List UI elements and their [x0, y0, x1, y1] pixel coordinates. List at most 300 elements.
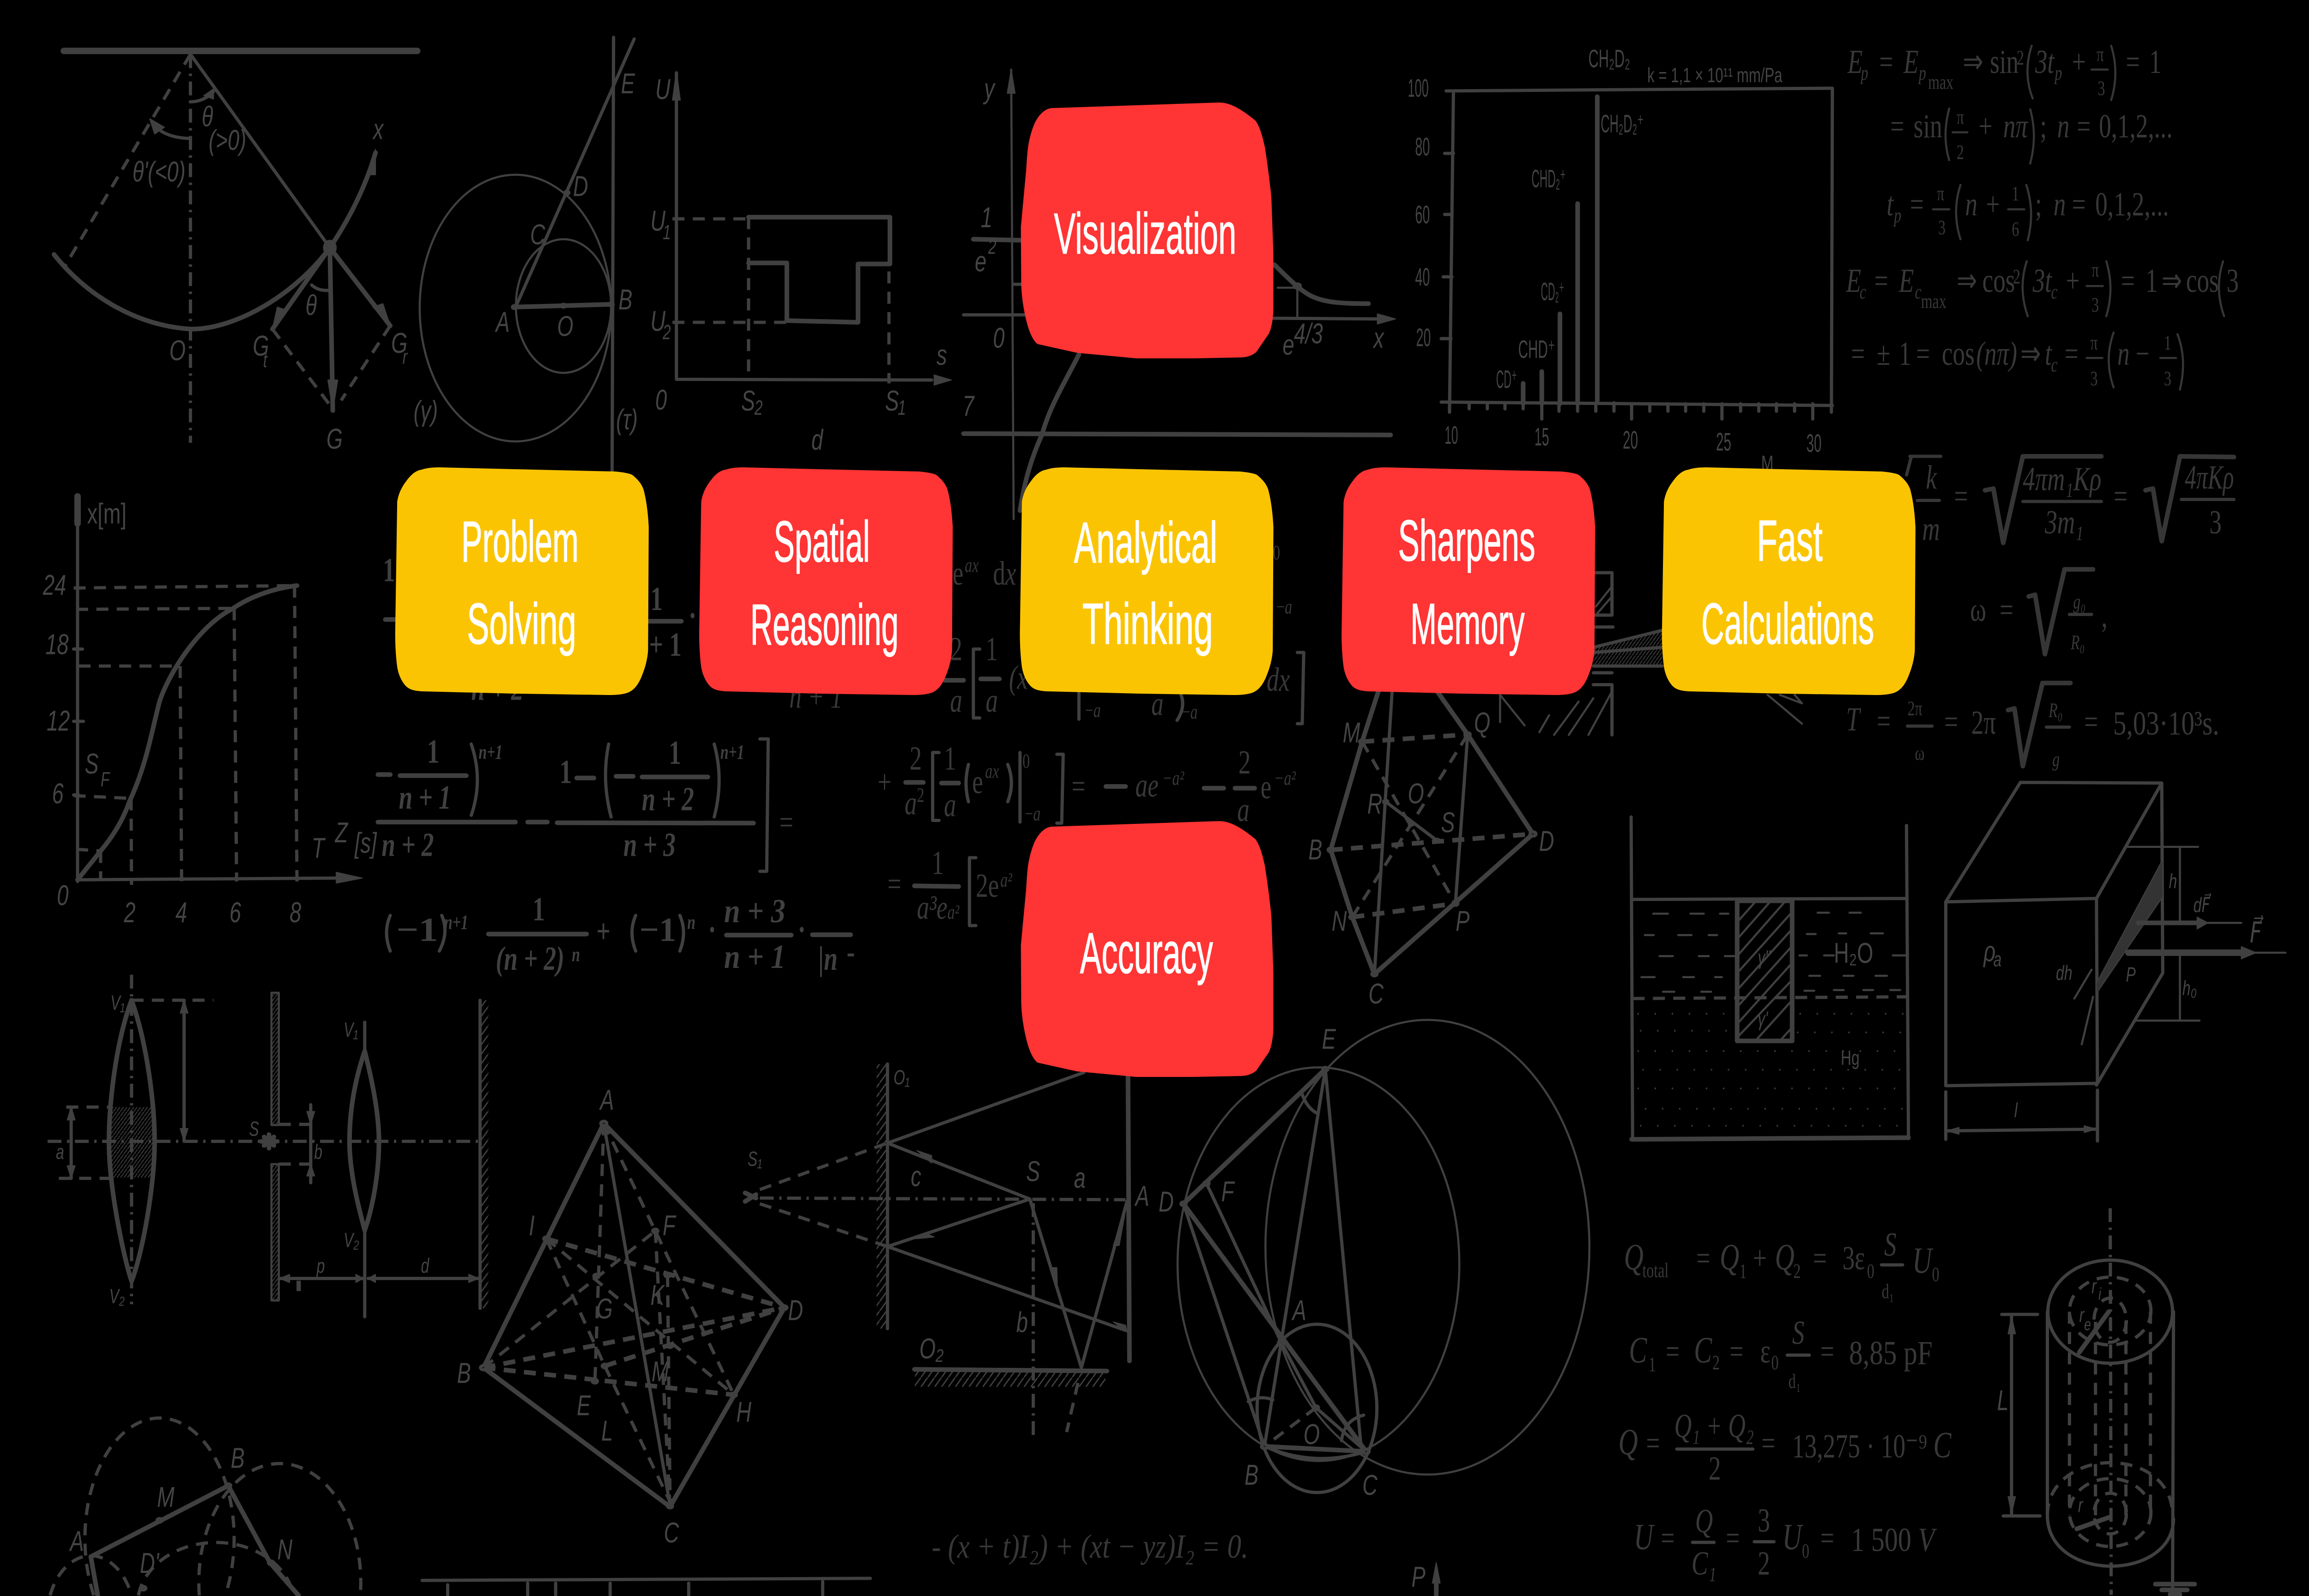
diagram: pyramid with dashed construction lines: A	[599, 1084, 614, 1116]
diagram: circles with inscribed triangles: D	[1159, 1185, 1174, 1218]
formula block: capacitor equations: 1	[1739, 1260, 1747, 1282]
formula block: energy maxima equations: 3	[1938, 217, 1946, 239]
diagram: mirror ray reflection: a	[1074, 1162, 1086, 1194]
formula block: capacitor equations: 8,85 pF	[1849, 1334, 1933, 1372]
formula block: energy maxima equations: 3	[2097, 78, 2105, 100]
diagram: polyhedron: M	[1343, 716, 1360, 749]
diagram: coaxial cylinder: r	[2091, 1275, 2097, 1298]
chart: mass spectrum bars with axis labels: CHD₂⁺	[1531, 164, 1566, 193]
formula block: series expansion: n + 3	[724, 892, 786, 930]
formula block: capacitor equations: =	[1813, 1239, 1827, 1277]
formula block: integral evaluation: −a²	[1162, 768, 1185, 790]
diagram: mirror ray reflection: b	[1016, 1306, 1028, 1338]
formula block: energy maxima equations: 1	[2149, 43, 2162, 80]
diagram: pendulum with force decomposition: G	[253, 330, 269, 362]
formula block: energy maxima equations: sin	[1990, 43, 2019, 80]
chart: mass spectrum bars with axis labels: 60	[1415, 200, 1430, 229]
formula block: energy maxima equations: cos	[1942, 334, 1975, 372]
chart: distance vs time S-curve graph: 0	[57, 879, 68, 912]
chart: mass spectrum bars with axis labels: CH₂D₂	[1589, 44, 1630, 73]
formula: xt minus yz equation: - (x + t)I₂) + (xt − yz)I₂ = 0.	[931, 1528, 1248, 1565]
diagram: double-slit lenses and screen: V₁	[344, 1019, 358, 1042]
diagram: fluid pressure on block wall	[1946, 782, 2285, 1141]
formula block: energy maxima equations: E	[1903, 43, 1918, 80]
formula block: energy maxima equations: =	[1890, 107, 1904, 145]
diagram: polyhedron: Q	[1474, 706, 1490, 738]
formula block: energy maxima equations: ⇒	[2020, 334, 2041, 372]
diagram: function curve with y and x axes: 4/3	[1294, 317, 1323, 350]
diagram: overlapping dashed circles: D'	[140, 1547, 160, 1579]
chart: voltage U versus s step graph	[650, 71, 951, 456]
diagram: pendulum with force decomposition: (>0)	[209, 124, 246, 156]
formula block: integral evaluation: 1	[944, 739, 956, 777]
formula block: angular frequency and period: 2π	[1908, 698, 1922, 720]
formula block: energy maxima equations: =	[1851, 334, 1865, 372]
formula block: series expansion: 1	[669, 733, 681, 771]
diagram: coaxial cylinder: L	[1997, 1384, 2009, 1416]
formula block: capacitor equations: 2	[1712, 1352, 1720, 1374]
formula block: integral evaluation: (x	[1009, 659, 1028, 696]
formula block: capacitor equations: =	[1661, 1519, 1674, 1557]
formula block: angular frequency and period: 5,03·10³s.	[2113, 704, 2219, 742]
formula block: square root equations: 4πKρ	[2185, 459, 2234, 496]
card: Spatial Reasoning: Spatial	[774, 510, 870, 574]
formula block: integral evaluation: 1	[985, 630, 998, 668]
formula block: capacitor equations: Q	[1695, 1502, 1713, 1540]
chart: distance vs time S-curve graph: 6	[52, 778, 64, 810]
formula block: energy maxima equations: 2	[2013, 266, 2020, 288]
formula block: energy maxima equations: ⇒	[2162, 262, 2182, 299]
formula block: energy maxima equations: 3	[2226, 262, 2239, 299]
diagram: pyramid with dashed construction lines: C	[664, 1517, 679, 1549]
formula block: energy maxima equations: 0,1,2,...	[2095, 185, 2169, 223]
formula block: integral evaluation: 2	[910, 739, 922, 777]
formula block: integral evaluation: dx	[1267, 661, 1290, 698]
formula block: energy maxima equations: =	[2077, 107, 2091, 145]
diagram: nested circles with tangent line: B	[618, 284, 632, 316]
formula block: capacitor equations: =	[1666, 1332, 1680, 1370]
formula block: capacitor equations: S	[1792, 1314, 1804, 1351]
diagram: pendulum with force decomposition: r	[403, 346, 408, 369]
chart: distance vs time S-curve graph: 2	[124, 896, 136, 929]
chart: mass spectrum bars with axis labels: 100	[1408, 74, 1429, 103]
chart: distance vs time S-curve graph: T	[312, 832, 326, 864]
chart: mass spectrum bars with axis labels: CD⁺	[1496, 365, 1517, 393]
diagram: polyhedron: B	[1308, 834, 1322, 866]
formula block: square root equations: 4πm₁Kρ	[2023, 460, 2101, 498]
formula block: series expansion: ·	[689, 597, 696, 635]
formula block: capacitor equations: C	[1629, 1330, 1647, 1371]
diagram: mirror ray reflection: O₁	[894, 1066, 910, 1089]
diagram: mirror ray reflection: O₂	[919, 1333, 943, 1365]
formula block: square root equations: 3	[2209, 503, 2222, 541]
card: Accuracy	[1021, 821, 1274, 1077]
formula block: series expansion: n + 2	[381, 826, 434, 864]
formula block: energy maxima equations: −	[2136, 334, 2150, 372]
formula block: energy maxima equations: 3	[2090, 368, 2097, 390]
formula block: energy maxima equations: +	[2066, 262, 2079, 299]
diagram: pyramid with dashed construction lines	[457, 1084, 785, 1549]
diagram: nested circles with tangent line	[414, 37, 638, 472]
formula block: capacitor equations: =	[1820, 1519, 1834, 1557]
formula block: energy maxima equations: cos	[1983, 262, 2015, 299]
formula block: integral evaluation: 2	[1239, 744, 1251, 781]
diagram: fluid pressure on block wall: l	[2014, 1099, 2018, 1122]
diagram: nested circles with tangent line: (γ)	[414, 395, 438, 427]
formula block: energy maxima equations: 1	[2146, 262, 2158, 299]
formula block: series expansion: n + 2	[642, 780, 694, 817]
formula block: series expansion: −1	[639, 911, 676, 948]
formula block: energy maxima equations: t	[1886, 185, 1894, 223]
chart: distance vs time S-curve graph: F	[101, 768, 110, 791]
diagram: nested circles with tangent line: A	[495, 306, 510, 338]
formula block: capacitor equations: C	[1694, 1330, 1712, 1371]
formula block: capacitor equations	[1618, 1226, 1952, 1582]
formula block: energy maxima equations: p	[1917, 62, 1926, 85]
icon: small P arrow at bottom edge	[1411, 1560, 1440, 1595]
diagram: hatched apparatus behind cards	[1500, 573, 1802, 735]
formula block: energy maxima equations: max	[1921, 290, 1946, 313]
formula block: energy maxima equations: 6	[2012, 218, 2019, 241]
formula block: series expansion: n	[572, 944, 580, 966]
formula block: energy maxima equations: 2	[2017, 47, 2024, 69]
card: Fast Calculations: Calculations	[1701, 592, 1874, 657]
chart: distance vs time S-curve graph: 12	[47, 705, 70, 737]
formula block: series expansion: n + 3	[623, 826, 676, 864]
diagram: coaxial cylinder: r	[2078, 1494, 2084, 1517]
diagram: coaxial cylinder: r	[2079, 1304, 2085, 1327]
formula block: capacitor equations: Q	[1720, 1236, 1739, 1278]
diagram: nested circles with tangent line: D	[573, 170, 588, 202]
chart: voltage U versus s step graph: U	[650, 305, 666, 337]
formula block: angular frequency and period: g	[2052, 749, 2060, 771]
formula block: angular frequency and period: R₀	[2070, 632, 2085, 654]
formula block: energy maxima equations: π	[1957, 106, 1964, 128]
formula block: capacitor equations: 0	[1867, 1260, 1874, 1282]
formula block: angular frequency and period: ω	[1970, 591, 1986, 629]
diagram: pyramid with dashed construction lines: F	[663, 1209, 677, 1242]
formula block: energy maxima equations: +	[1979, 107, 1993, 145]
formula block: capacitor equations: =	[1696, 1239, 1710, 1277]
formula block: energy maxima equations: +	[2072, 43, 2086, 80]
formula block: integral evaluation: 2	[917, 784, 924, 806]
diagram: circles with inscribed triangles: F	[1221, 1175, 1235, 1208]
chart: mass spectrum bars with axis labels: 20	[1416, 323, 1431, 352]
chart: voltage U versus s step graph: U	[655, 73, 671, 105]
formula block: series expansion: n + 1	[399, 778, 451, 816]
chart: voltage U versus s step graph: d	[811, 423, 824, 456]
card: Sharpens Memory: Sharpens	[1398, 509, 1535, 574]
formula block: energy maxima equations: =	[2121, 262, 2135, 299]
diagram: polyhedron: P	[1456, 905, 1469, 937]
diagram: double-slit lenses and screen: V₁	[110, 991, 125, 1015]
chart: mass spectrum bars with axis labels: CHD⁺	[1518, 335, 1555, 364]
formula block: energy maxima equations: 3t	[2035, 43, 2055, 80]
chart: mass spectrum bars with axis labels	[1408, 44, 1832, 475]
chart: voltage U versus s step graph: 0	[655, 384, 667, 416]
formula block: energy maxima equations: E	[1846, 262, 1861, 299]
formula block: capacitor equations: 2	[1758, 1544, 1770, 1582]
diagram: pendulum with force decomposition	[54, 51, 417, 455]
formula block: series expansion: −1	[396, 911, 438, 948]
diagram: function curve with y and x axes: 0	[993, 322, 1004, 354]
formula block: integral evaluation: a	[1237, 791, 1250, 828]
diagram: polyhedron: N	[1332, 905, 1347, 937]
formula block: integral evaluation: 0	[1273, 542, 1280, 564]
formula block: integral evaluation: =	[888, 865, 901, 902]
formula block: capacitor equations: ε	[1760, 1332, 1771, 1370]
formula block: series expansion: 1	[383, 551, 395, 589]
formula block: energy maxima equations: n	[1965, 185, 1977, 223]
formula block: energy maxima equations: 3	[2091, 294, 2099, 316]
chart: voltage U versus s step graph: 1	[663, 221, 671, 244]
diagram: mirror ray reflection: A	[1134, 1180, 1149, 1212]
chart: distance vs time S-curve graph: 24	[42, 569, 66, 601]
diagram: function curve with y and x axes: 2	[988, 236, 996, 259]
formula block: series expansion: + 1	[649, 626, 682, 663]
diagram: circles with inscribed triangles: A	[1291, 1294, 1306, 1326]
diagram: pyramid with dashed construction lines: B	[457, 1357, 471, 1389]
formula block: integral evaluation: a³ea²	[917, 889, 960, 926]
diagram: circles with inscribed triangles: E	[1322, 1023, 1336, 1055]
chart: voltage U versus s step graph: 2	[662, 321, 671, 344]
diagram: water and mercury tank: γ"	[1758, 947, 1771, 969]
diagram: pyramid with dashed construction lines: G	[596, 1293, 613, 1325]
formula block: energy maxima equations: E	[1847, 43, 1862, 80]
chart: mass spectrum bars with axis labels: 40	[1415, 263, 1430, 291]
formula block: integral evaluation: ax	[985, 761, 999, 783]
formula block: integral evaluation: e	[1261, 768, 1271, 806]
formula block: energy maxima equations: 3	[2164, 368, 2171, 390]
formula block: energy maxima equations: c	[1915, 281, 1922, 303]
formula block: series expansion: (n + 2)	[496, 939, 564, 977]
diagram: nested circles with tangent line: (τ)	[616, 403, 638, 435]
formula block: integral evaluation: =	[1071, 767, 1085, 805]
diagram: overlapping dashed circles: N	[278, 1534, 293, 1566]
formula block: capacitor equations: =	[1820, 1332, 1834, 1370]
formula block: energy maxima equations: 1	[1899, 334, 1911, 372]
formula block: capacitor equations: 1	[1649, 1354, 1656, 1376]
diagram: circles with inscribed triangles: O	[1304, 1418, 1320, 1451]
formula block: energy maxima equations: c	[2051, 281, 2058, 303]
diagram: double-slit lenses and screen: S	[249, 1118, 259, 1141]
formula block: energy maxima equations: p	[1893, 205, 1901, 227]
formula block: series expansion: ·	[708, 911, 716, 948]
chart: voltage U versus s step graph: U	[650, 205, 666, 237]
chart: voltage U versus s step graph: 1	[898, 397, 906, 419]
diagram: function curve with y and x axes: 7	[962, 390, 975, 422]
formula block: integral evaluation: ae	[1136, 767, 1159, 804]
diagram: pendulum with force decomposition: x	[372, 113, 384, 145]
formula block: series expansion: 1	[650, 580, 663, 617]
formula block: capacitor equations: d₁	[1882, 1281, 1894, 1303]
diagram: double-slit lenses and screen: p	[316, 1255, 325, 1277]
diagram: circles with inscribed triangles: D	[788, 1294, 803, 1326]
formula block: integral evaluation: +	[878, 763, 891, 801]
diagram: pendulum with force decomposition: G	[326, 423, 343, 455]
formula block: series expansion: +	[596, 913, 610, 950]
card: Analytical Thinking: Thinking	[1082, 592, 1213, 657]
formula block: angular frequency and period: ω	[1915, 743, 1924, 765]
diagram: pyramid with dashed construction lines: I	[529, 1209, 535, 1242]
formula block: energy maxima equations: 1	[2012, 183, 2019, 205]
diagram: fluid pressure on block wall: ρ	[1983, 935, 1995, 967]
formula block: integral evaluation: 0	[1022, 750, 1030, 773]
formula block: square root equations: 3m₁	[2044, 503, 2084, 541]
formula block: capacitor equations: U	[1634, 1517, 1655, 1558]
diagram: function curve with y and x axes: e	[1282, 329, 1294, 361]
formula block: square root equations: m	[1922, 510, 1940, 548]
formula block: capacitor equations: S	[1884, 1226, 1897, 1263]
formula block: capacitor equations: 2	[1793, 1260, 1801, 1282]
formula block: energy maxima equations: 0,1,2,...	[2099, 107, 2172, 145]
formula block: capacitor equations: 0	[1771, 1352, 1779, 1374]
diagram: pendulum with force decomposition: θ	[306, 289, 317, 321]
diagram: polyhedron	[1308, 691, 1554, 1010]
chart: mass spectrum bars with axis labels: CH₂D₂⁺	[1601, 109, 1644, 138]
card: Analytical Thinking: Analytical	[1074, 511, 1217, 575]
chart: distance vs time S-curve graph: 8	[290, 896, 301, 929]
chart: distance vs time S-curve graph: 6	[230, 896, 242, 929]
chart: mass spectrum bars with axis labels: M	[1761, 452, 1773, 475]
diagram: mirror ray reflection	[745, 1064, 1149, 1435]
formula block: integral evaluation: −a	[1182, 701, 1197, 723]
formula block: energy maxima equations: =	[2126, 43, 2140, 80]
formula block: energy maxima equations: =	[2065, 334, 2079, 372]
formula block: energy maxima equations: p	[1860, 62, 1868, 85]
formula block: angular frequency and period: =	[2000, 591, 2013, 629]
formula block: energy maxima equations: c	[1860, 281, 1866, 303]
formula block: series expansion: n + 1	[724, 938, 786, 975]
diagram: function curve with y and x axes: y	[983, 73, 996, 105]
formula block: integral evaluation: −a²	[1274, 768, 1296, 790]
diagram: fluid pressure on block wall: dF⃗	[2194, 892, 2212, 917]
formula block: capacitor equations: Q	[1624, 1236, 1644, 1278]
formula block: energy maxima equations: n	[2117, 334, 2130, 372]
diagram: polyhedron: O	[1408, 778, 1424, 810]
diagram: overlapping dashed circles: B	[231, 1442, 245, 1474]
formula block: capacitor equations: d₁	[1789, 1371, 1801, 1393]
formula block: series expansion: ·	[798, 911, 806, 948]
chart: distance vs time S-curve graph: Z	[334, 816, 348, 849]
diagram: overlapping dashed circles	[50, 1418, 361, 1596]
formula block: integral evaluation: a	[950, 682, 962, 719]
diagram: overlapping dashed circles: A	[69, 1525, 84, 1557]
formula block: capacitor equations: C	[1933, 1425, 1952, 1466]
formula block: energy maxima equations: E	[1898, 262, 1914, 299]
diagram: circles with inscribed triangles: C	[1362, 1469, 1378, 1501]
diagram: polyhedron: R	[1367, 788, 1382, 820]
formula block: angular frequency and period: R₀	[2048, 700, 2063, 722]
diagram: coaxial cylinder	[1997, 1208, 2194, 1595]
formula block: energy maxima equations: ;	[2040, 107, 2047, 145]
formula block: energy maxima equations: p	[2054, 62, 2062, 85]
chart: mass spectrum bars with axis labels: CD₂⁺	[1541, 278, 1564, 306]
chart: mass spectrum bars with axis labels: 30	[1807, 429, 1822, 458]
formula block: capacitor equations: Q	[1618, 1421, 1638, 1463]
diagram: function curve with y and x axes: x	[1372, 322, 1384, 354]
card: Fast Calculations	[1662, 467, 1916, 695]
formula block: integral evaluation: a	[905, 784, 917, 822]
formula block: capacitor equations: 0	[1802, 1540, 1809, 1562]
formula block: square root equations: k	[1926, 459, 1937, 496]
diagram: pyramid with dashed construction lines: K	[650, 1279, 665, 1311]
formula block: angular frequency and period: g₀	[2073, 591, 2085, 613]
formula block: capacitor equations: =	[1646, 1424, 1660, 1462]
diagram: double-slit lenses and screen: V₂	[109, 1285, 125, 1308]
diagram: pyramid with dashed construction lines: M	[652, 1355, 669, 1388]
formula block: energy maxima equations: ⇒	[1963, 43, 1983, 80]
formula block: square root equations: =	[2114, 477, 2128, 514]
formula block: series expansion: 1	[532, 890, 545, 928]
diagram: double-slit lenses and screen: a	[56, 1141, 64, 1164]
formula block: series expansion: 1	[560, 753, 572, 791]
formula block: capacitor equations: 3ε	[1843, 1239, 1865, 1277]
chart: distance vs time S-curve graph: S	[85, 748, 98, 780]
formula block: capacitor equations: 0	[1932, 1264, 1940, 1286]
formula block: energy maxima equations: ;	[2035, 185, 2042, 223]
chart: distance vs time S-curve graph: x[m]	[87, 497, 127, 530]
formula block: capacitor equations: 2	[1709, 1450, 1721, 1487]
chart: voltage U versus s step graph: S	[741, 385, 755, 417]
diagram: fluid pressure on block wall: P	[2126, 964, 2136, 986]
diagram: double-slit lenses and screen: V₂	[344, 1229, 359, 1252]
diagram: water and mercury tank: H₂O	[1834, 937, 1873, 969]
formula block: capacitor equations: total	[1643, 1260, 1668, 1282]
formula block: series expansion: n + 2	[471, 670, 523, 707]
diagram: water and mercury tank	[1631, 817, 1909, 1139]
formula block: energy maxima equations: =	[1916, 334, 1930, 372]
formula block: capacitor equations: Q₁ + Q₂	[1674, 1407, 1754, 1445]
formula block: capacitor equations: U	[1782, 1517, 1803, 1558]
formula block: angular frequency and period	[1846, 569, 2219, 771]
formula block: energy maxima equations: c	[2051, 354, 2058, 376]
diagram: water and mercury tank: γ'	[1758, 1008, 1769, 1030]
formula block: angular frequency and period: =	[1877, 702, 1891, 740]
chart: mass spectrum bars with axis labels: 80	[1415, 133, 1430, 161]
formula block: energy maxima equations: 2	[1957, 141, 1964, 163]
card: Sharpens Memory: Memory	[1410, 592, 1525, 657]
diagram: polyhedron: S	[1441, 806, 1455, 839]
formula block: integral evaluation: a	[944, 786, 956, 824]
diagram: mirror ray reflection: S₁	[748, 1148, 762, 1171]
formula block: energy maxima equations: =	[1874, 262, 1888, 299]
diagram: pendulum with force decomposition: G	[391, 327, 407, 359]
formula block: capacitor equations: =	[1761, 1424, 1775, 1462]
diagram: circles with inscribed triangles: B	[1245, 1459, 1258, 1491]
formula block: capacitor equations: U	[1912, 1240, 1934, 1281]
formula block: energy maxima equations: =	[1910, 185, 1924, 223]
formula block: series expansion: n+1	[478, 741, 502, 763]
formula block: energy maxima equations: ±	[1877, 334, 1890, 372]
formula block: energy maxima equations: t	[2045, 334, 2053, 372]
card: Fast Calculations: Fast	[1757, 509, 1823, 574]
chart: mass spectrum bars with axis labels: 15	[1535, 423, 1549, 451]
card: Visualization: Visualization	[1054, 202, 1236, 266]
formula block: capacitor equations: C₁	[1692, 1544, 1717, 1582]
chart: mass spectrum bars with axis labels: 10	[1445, 421, 1458, 450]
diagram: fluid pressure on block wall: dh	[2056, 962, 2073, 985]
formula block: energy maxima equations: sin	[1914, 107, 1942, 145]
formula block: integral evaluation: −a	[1276, 596, 1292, 618]
chart: distance vs time S-curve graph: 18	[45, 628, 69, 660]
card: Sharpens Memory	[1342, 467, 1595, 695]
formula block: capacitor equations: 13,275 · 10⁻⁹	[1792, 1427, 1927, 1465]
chart: distance vs time S-curve graph: [s]	[354, 827, 377, 859]
formula block: capacitor equations: =	[1729, 1332, 1743, 1370]
formula block: energy maxima equations: cos	[2186, 262, 2219, 299]
formula block: energy maxima equations: =	[1879, 43, 1893, 80]
